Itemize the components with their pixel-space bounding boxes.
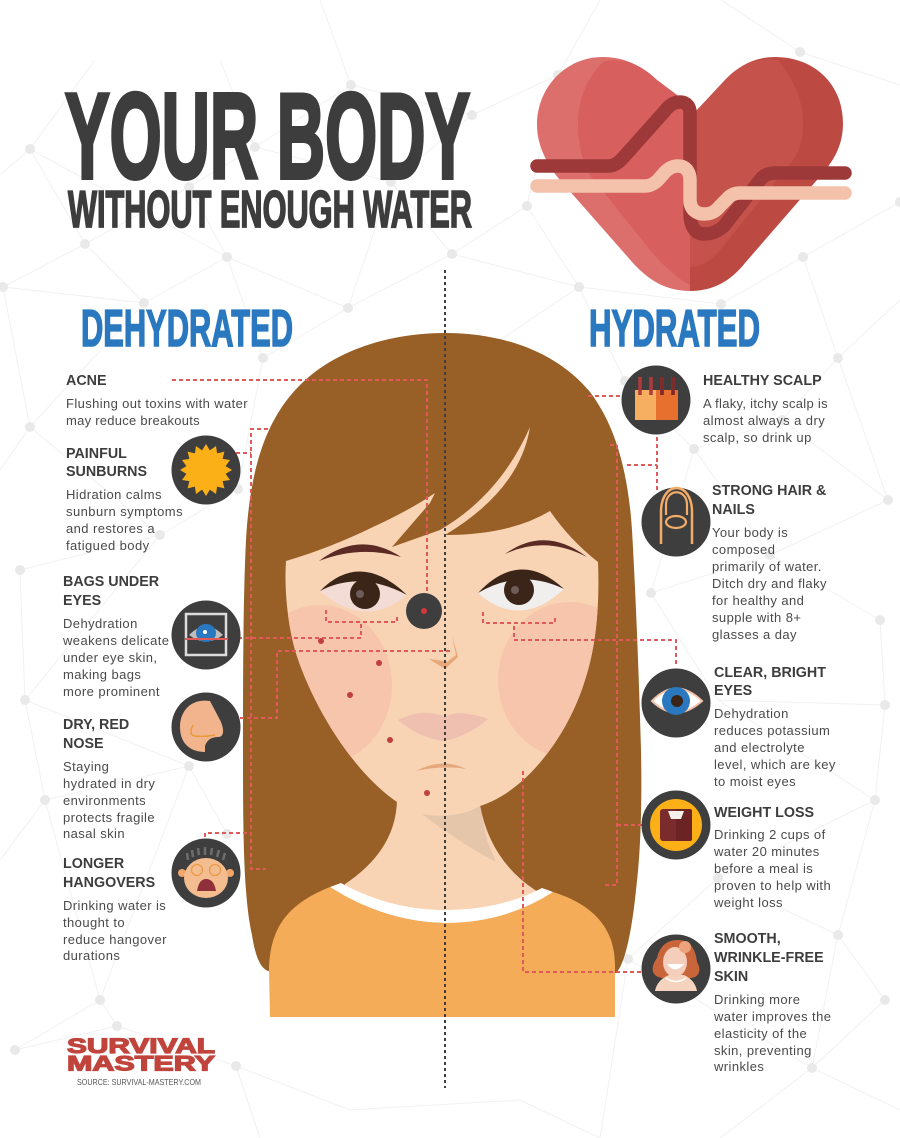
- illustration: woman's face: [243, 333, 642, 1017]
- heading: dehydrated: DEHYDRATED: [81, 300, 293, 358]
- text: acne: [66, 373, 248, 428]
- icon: hangover face: [172, 838, 240, 908]
- text: acne: Flushing out toxins with water: [66, 396, 248, 411]
- icon: heart with pulse lines: [537, 57, 845, 291]
- text: smooth wrinkle-free skin: SMOOTH,: [714, 931, 781, 947]
- text: strong hair and nails: composed: [712, 542, 775, 557]
- text: painful sunburns: [66, 446, 183, 553]
- icon: bright eye: [642, 668, 710, 738]
- logo: survival mastery: MASTERY: [67, 1052, 215, 1076]
- icon: smiling woman: [642, 934, 710, 1004]
- text: bags under eyes: making bags: [63, 667, 141, 682]
- title: [65, 68, 472, 239]
- text: dry red nose: environments: [63, 793, 146, 808]
- text: bags under eyes: more prominent: [63, 684, 160, 699]
- text: smooth wrinkle-free skin: [713, 931, 831, 1074]
- text: strong hair and nails: for healthy and: [712, 593, 804, 608]
- text: clear bright eyes: CLEAR, BRIGHT: [714, 665, 826, 681]
- text: painful sunburns: SUNBURNS: [66, 464, 147, 480]
- text: strong hair and nails: supple with 8+: [712, 610, 801, 625]
- hair: [243, 333, 641, 973]
- text: weight loss: Drinking 2 cups of: [714, 827, 826, 842]
- text: longer hangovers: HANGOVERS: [63, 875, 155, 891]
- text: smooth wrinkle-free skin: skin, preventing: [714, 1043, 812, 1058]
- title: WITHOUT ENOUGH WATER: [68, 181, 472, 239]
- collar: [330, 883, 553, 923]
- text: strong hair and nails: Your body is: [712, 525, 788, 540]
- text: smooth wrinkle-free skin: water improves the: [713, 1009, 831, 1024]
- text: weight loss: before a meal is: [714, 861, 813, 876]
- text: dry red nose: hydrated in dry: [63, 776, 155, 791]
- text: strong hair and nails: Ditch dry and flaky: [712, 576, 827, 591]
- text: bags under eyes: EYES: [63, 593, 101, 609]
- acne spots: [318, 638, 430, 796]
- text: longer hangovers: durations: [63, 948, 120, 963]
- light pulse line: [537, 166, 845, 214]
- neck shadow: [422, 806, 496, 862]
- text: clear bright eyes: EYES: [714, 683, 752, 699]
- icon: nose: [172, 692, 240, 762]
- text: longer hangovers: LONGER: [63, 856, 125, 872]
- text: longer hangovers: thought to: [63, 915, 125, 930]
- text: clear bright eyes: and electrolyte: [714, 740, 805, 755]
- text: acne: ACNE: [66, 373, 107, 389]
- text: strong hair and nails: primarily of water.: [712, 559, 822, 574]
- heading: hydrated: HYDRATED: [589, 300, 760, 358]
- text: painful sunburns: Hidration calms: [66, 487, 162, 502]
- text: smooth wrinkle-free skin: wrinkles: [713, 1059, 764, 1074]
- logo: survival mastery: [67, 1035, 215, 1076]
- text: weight loss: weight loss: [713, 895, 783, 910]
- face: [285, 427, 598, 813]
- right eye: [478, 569, 564, 611]
- icon: fingernail: [642, 488, 710, 556]
- text: smooth wrinkle-free skin: SKIN: [714, 969, 748, 985]
- acne marker: [406, 593, 442, 629]
- text: strong hair and nails: glasses a day: [712, 627, 797, 642]
- title: YOUR BODY: [65, 68, 470, 204]
- text: strong hair and nails: NAILS: [712, 502, 755, 518]
- text: painful sunburns: PAINFUL: [66, 446, 127, 462]
- text: longer hangovers: reduce hangover: [63, 932, 167, 947]
- text: painful sunburns: sunburn symptoms: [66, 504, 183, 519]
- text: smooth wrinkle-free skin: WRINKLE-FREE: [714, 950, 824, 966]
- center dividing line: [444, 270, 446, 1088]
- text: strong hair and nails: STRONG HAIR &: [712, 483, 826, 499]
- icon: sunburn: [172, 436, 240, 504]
- text: weight loss: proven to help with: [714, 878, 831, 893]
- text: painful sunburns: and restores a: [66, 521, 155, 536]
- shirt: [269, 887, 615, 1017]
- text: dry red nose: nasal skin: [63, 826, 125, 841]
- icon: eye bags: [172, 600, 240, 670]
- text: dry red nose: Staying: [63, 759, 109, 774]
- brows: [319, 544, 401, 561]
- text: bags under eyes: [62, 574, 169, 699]
- text: weight loss: WEIGHT LOSS: [714, 805, 814, 821]
- text: dry red nose: DRY, RED: [63, 717, 129, 733]
- left eye: [320, 571, 407, 612]
- text: healthy scalp: almost always a dry: [703, 413, 825, 428]
- text: clear bright eyes: reduces potassium: [714, 723, 830, 738]
- text: healthy scalp: A flaky, itchy scalp is: [703, 396, 828, 411]
- lips: [398, 713, 488, 741]
- text: longer hangovers: Drinking water is: [63, 898, 166, 913]
- source line: SOURCE: SURVIVAL-MASTERY.COM: [77, 1077, 201, 1087]
- text: weight loss: [713, 805, 831, 910]
- icon: scalp: [622, 366, 690, 434]
- text: healthy scalp: scalp, so drink up: [703, 430, 812, 445]
- text: clear bright eyes: to moist eyes: [714, 774, 796, 789]
- chin shadow: [416, 763, 466, 771]
- text: bags under eyes: under eye skin,: [63, 650, 157, 665]
- text: longer hangovers: [63, 856, 167, 963]
- icon: scale: [642, 790, 710, 860]
- text: healthy scalp: [703, 373, 828, 445]
- text: acne: may reduce breakouts: [66, 413, 200, 428]
- text: painful sunburns: fatigued body: [66, 538, 150, 553]
- text: bags under eyes: weakens delicate: [62, 633, 169, 648]
- text: dry red nose: NOSE: [63, 736, 104, 752]
- nose: [429, 635, 458, 669]
- cheeks: [288, 602, 598, 757]
- text: strong hair and nails: [712, 483, 827, 642]
- connector lines: [172, 380, 676, 972]
- text: clear bright eyes: [714, 665, 836, 789]
- text: clear bright eyes: Dehydration: [714, 706, 789, 721]
- text: dry red nose: [63, 717, 155, 841]
- text: smooth wrinkle-free skin: Drinking more: [714, 992, 800, 1007]
- text: weight loss: water 20 minutes: [713, 844, 820, 859]
- neck: [340, 800, 550, 922]
- text: dry red nose: protects fragile: [63, 810, 155, 825]
- text: bags under eyes: Dehydration: [63, 616, 138, 631]
- text: bags under eyes: BAGS UNDER: [63, 574, 160, 590]
- text: healthy scalp: HEALTHY SCALP: [703, 373, 822, 389]
- logo: survival mastery: SURVIVAL: [67, 1035, 215, 1058]
- dark pulse line: [537, 102, 845, 234]
- text: clear bright eyes: level, which are key: [714, 757, 836, 772]
- text: smooth wrinkle-free skin: elasticity of the: [714, 1026, 807, 1041]
